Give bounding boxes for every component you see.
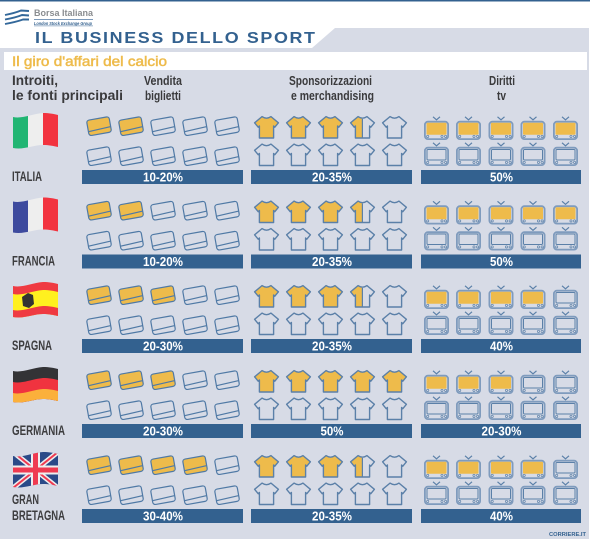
bar: biglietti 10-20% [82, 254, 243, 269]
column heading: diritti tv: tv [497, 88, 507, 103]
column heading: vendita biglietti: biglietti [145, 88, 181, 103]
bar: tv 40%: 40% [490, 338, 513, 354]
tv 40% [425, 286, 577, 334]
bar: sponsor 20-35% [251, 508, 412, 524]
flag: Gran Bretagna [13, 452, 58, 488]
column heading: vendita biglietti: Vendita [144, 73, 183, 88]
bar: tv 40% [421, 508, 581, 524]
tickets 10-20% [86, 117, 240, 166]
icon: logo stripes [5, 10, 29, 24]
column heading: sponsorizzazioni e merchandising: e merchandising [291, 88, 374, 103]
column heading: diritti tv [489, 73, 515, 103]
logo wordmark: Borsa Italiana [34, 8, 94, 18]
bar: biglietti 20-30%: 20-30% [143, 424, 183, 438]
bar: sponsor 20-35%: 20-35% [312, 254, 352, 269]
row: Italia [12, 110, 581, 184]
heading: introiti: le fonti principali [12, 87, 123, 103]
row: Gran Bretagna [12, 447, 581, 524]
bar: sponsor 20-35% [251, 254, 412, 269]
label: Gran Bretagna: GRAN [12, 491, 39, 507]
flag: Francia [13, 198, 58, 233]
label: Spagna: SPAGNA [12, 337, 52, 353]
bar: tv 40%: 40% [490, 508, 513, 524]
bar: biglietti 10-20%: 10-20% [143, 254, 183, 269]
bar: biglietti 30-40%: 30-40% [143, 508, 183, 524]
column heading: diritti tv: Diritti [489, 73, 515, 88]
bar: sponsor 20-35%: 20-35% [312, 508, 352, 524]
bar: tv 20-30% [421, 424, 581, 438]
bar: tv 50% [421, 170, 581, 184]
label: Gran Bretagna: BRETAGNA [12, 507, 65, 523]
tv 50% [425, 117, 577, 165]
tickets 30-40% [86, 456, 240, 505]
subtitle: Il giro d'affari del calcio [12, 53, 167, 69]
credit: CORRIERE.IT [549, 532, 587, 538]
row: Spagna [12, 279, 581, 354]
tickets 20-30% [86, 286, 240, 335]
flag: Spagna [13, 282, 58, 318]
column heading: vendita biglietti [144, 73, 183, 103]
bar: tv 40% [421, 338, 581, 354]
bar: tv 50% [421, 254, 581, 269]
bar: tv 50%: 50% [490, 170, 513, 184]
tickets 20-30% [86, 371, 240, 420]
bar: tv 50%: 50% [490, 254, 513, 269]
shirts 20-35% [255, 286, 406, 334]
bar: sponsor 20-35% [251, 338, 412, 354]
shirts 20-35% [255, 117, 406, 166]
logo rule and tagline: London Stock Exchange Group [34, 21, 92, 26]
bar: biglietti 20-30% [82, 424, 243, 438]
label: Germania: GERMANIA [12, 422, 65, 438]
bar: sponsor 50%: 50% [320, 424, 344, 438]
label: Gran Bretagna [12, 491, 65, 523]
bar: sponsor 50% [251, 424, 412, 438]
label: Italia: ITALIA [12, 168, 42, 184]
shirts 20-35% [255, 456, 406, 504]
bar: sponsor 20-35%: 20-35% [312, 170, 352, 184]
logo: Borsa Italiana [5, 8, 94, 26]
bar: sponsor 20-35%: 20-35% [312, 338, 352, 354]
bar: sponsor 20-35% [251, 170, 412, 184]
tv 20-30% [425, 371, 577, 419]
column heading: sponsorizzazioni e merchandising: Sponsorizzazioni [289, 73, 372, 88]
bar: biglietti 30-40% [82, 508, 243, 524]
flag: Italia [13, 113, 58, 148]
tv 40% [425, 456, 577, 504]
bar: biglietti 20-30% [82, 338, 243, 354]
label: Francia: FRANCIA [12, 252, 55, 268]
tickets 10-20% [86, 201, 240, 250]
bar: tv 20-30%: 20-30% [482, 424, 522, 438]
heading: introiti [12, 72, 123, 103]
row: Francia [12, 194, 581, 269]
title: IL BUSINESS DELLO SPORT [35, 29, 316, 47]
tv 50% [425, 201, 577, 250]
column heading: sponsorizzazioni e merchandising [289, 73, 374, 103]
heading: introiti: Introiti, [12, 72, 58, 88]
bar: biglietti 10-20% [82, 170, 243, 184]
bar: biglietti 10-20%: 10-20% [143, 170, 183, 184]
row: Germania [12, 364, 581, 438]
shirts 50% [255, 371, 406, 420]
flag: Germania [13, 367, 58, 402]
subtitle band [4, 52, 587, 70]
top rule [0, 0, 590, 2]
bar: biglietti 20-30%: 20-30% [143, 338, 183, 354]
shirts 20-35% [255, 201, 406, 250]
